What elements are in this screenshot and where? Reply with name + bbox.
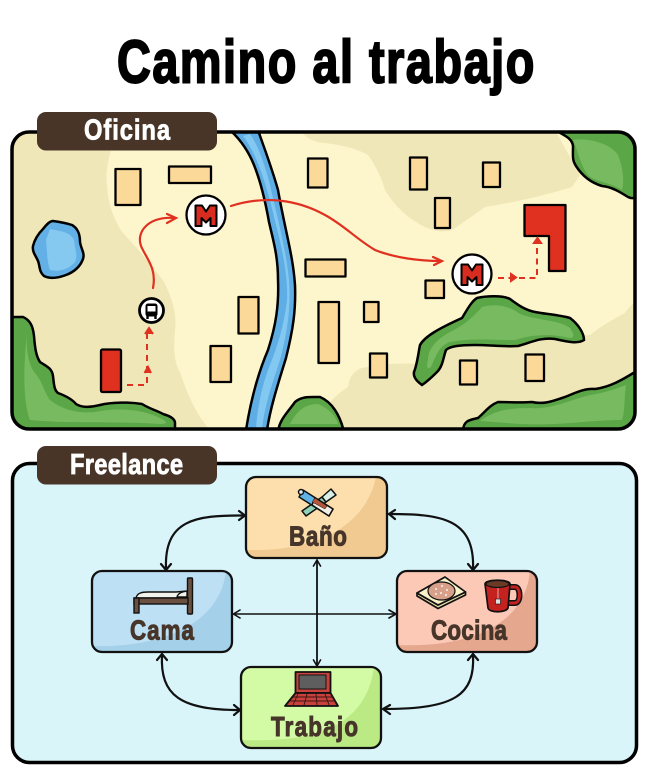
terrain: top right tan area (300, 130, 580, 231)
terrain: bottom right tan area (318, 302, 636, 430)
route: metro to metro (231, 200, 442, 265)
route: bus to metro (140, 214, 176, 288)
forest: bottom right (462, 372, 634, 428)
box: Cocina (397, 571, 540, 655)
icon: toothbrush and toothpaste (298, 489, 336, 516)
building: office red (524, 205, 566, 271)
panel: Oficina map (10, 130, 640, 432)
icon: bus (140, 298, 164, 322)
map outline (12, 132, 635, 429)
label: Oficina (37, 112, 217, 150)
route: dashed home to bus (127, 328, 153, 385)
box: Cama (92, 571, 235, 655)
icon: bed (134, 578, 192, 614)
label text: Baño (289, 521, 347, 552)
river (230, 130, 295, 430)
label text: Trabajo (271, 712, 358, 743)
lake (33, 221, 84, 278)
building: home red (101, 350, 121, 392)
buildings (116, 158, 544, 384)
icon: plate with food (417, 577, 466, 608)
box: Baño (246, 477, 390, 560)
label text: Cocina (431, 615, 508, 646)
icon: metro 1 (186, 196, 226, 234)
label: Freelance: Freelance (70, 448, 183, 481)
forest: top right (558, 134, 634, 200)
title: Camino al trabajo (117, 29, 534, 96)
forest: bottom left (10, 317, 175, 432)
icon: metro 2 (452, 254, 492, 294)
forest: bottom centre (278, 397, 344, 432)
icon: laptop (285, 672, 338, 706)
arrows: connections (157, 510, 478, 715)
label: Freelance (37, 446, 217, 484)
forest: centre right (414, 296, 584, 385)
label: Oficina: Oficina (84, 113, 170, 146)
terrain: left tan area (10, 130, 210, 430)
label text: Cama (130, 615, 195, 646)
box: Trabajo (241, 667, 384, 750)
route: dashed metro to office (498, 238, 541, 281)
panel: Freelance (12, 464, 636, 762)
icon: red mug (485, 580, 520, 612)
